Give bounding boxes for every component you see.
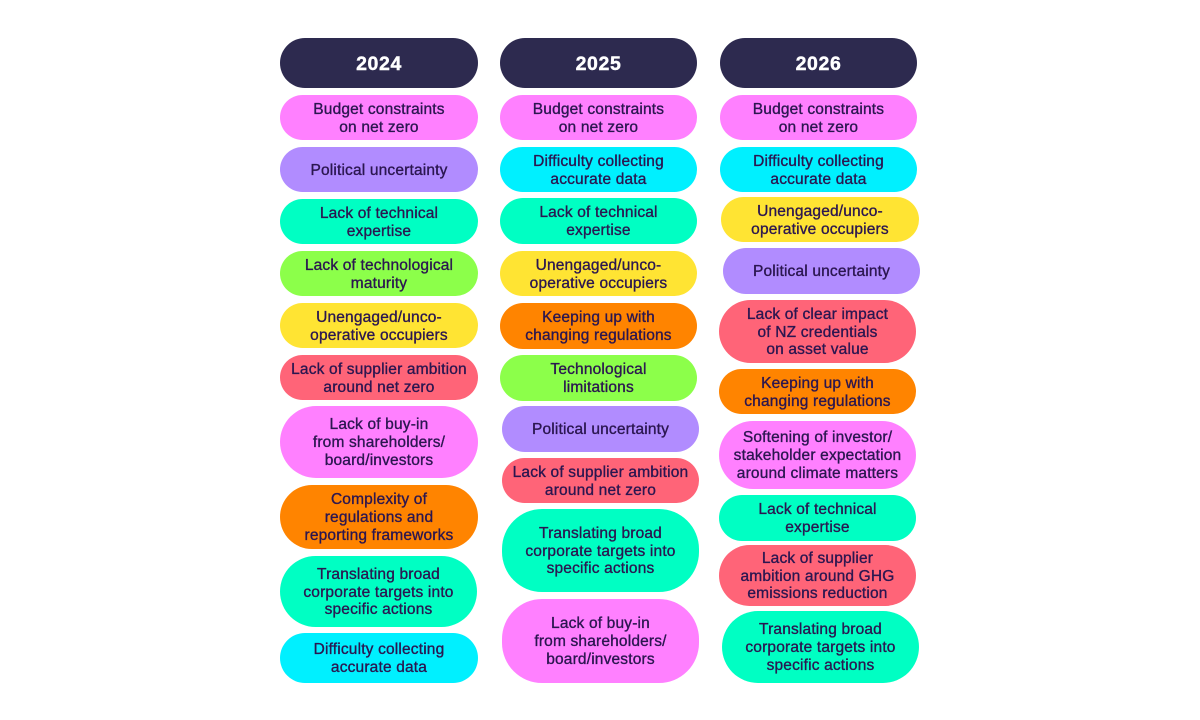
pill: clear impact of credentials: Lack of clear impact xyxy=(747,306,888,323)
pill: technical expertise: expertise xyxy=(347,222,411,240)
pill: technological limitations xyxy=(500,355,697,401)
pill: unengaged occupiers xyxy=(280,303,478,348)
pill: supplier ambition GHG: ambition around GHG xyxy=(740,568,894,585)
pill: unengaged occupiers: Unengaged/unco- xyxy=(536,257,661,274)
pill: difficulty collecting data: accurate data xyxy=(550,170,647,188)
pill: political uncertainty: Political uncertainty xyxy=(753,263,890,280)
pill: changing regulations xyxy=(500,303,697,349)
pill: supplier ambition GHG: emissions reduction xyxy=(747,585,888,602)
pill: translating targets: corporate targets into xyxy=(303,584,454,601)
pill: buy-in: Lack of buy-in xyxy=(330,416,428,433)
header: 2025 xyxy=(500,38,697,88)
pill: supplier ambition: around net zero xyxy=(323,378,435,396)
pill: technological maturity: Lack of technological xyxy=(305,257,453,274)
pill: supplier ambition: Lack of supplier ambition xyxy=(291,361,467,378)
pill: translating targets: specific actions xyxy=(547,560,654,577)
pill: budget constraints xyxy=(500,95,697,140)
pill: technical expertise: Lack of technical xyxy=(758,501,877,518)
pill: buy-in xyxy=(280,406,478,478)
pill: unengaged occupiers: operative occupiers xyxy=(530,274,667,292)
column: 2026 xyxy=(719,38,920,683)
pill: technological limitations: Technological xyxy=(550,361,647,378)
pill: technological maturity xyxy=(280,251,478,296)
pill: difficulty collecting data: accurate data xyxy=(331,659,427,676)
pill: technical expertise: Lack of technical xyxy=(539,204,658,221)
pill: political uncertainty xyxy=(280,147,478,192)
pill: unengaged occupiers: Unengaged/unco- xyxy=(757,203,883,220)
pill: translating targets xyxy=(502,509,699,592)
pill: softening of expectation xyxy=(719,421,916,489)
pill: budget constraints xyxy=(280,95,478,140)
pill: translating targets xyxy=(722,611,919,683)
pill: technical expertise: expertise xyxy=(566,222,631,239)
pill: clear impact of credentials: on asset value xyxy=(766,341,869,358)
pill: buy-in: board/investors xyxy=(546,651,655,668)
pill: difficulty collecting data: Difficulty collecting xyxy=(533,153,664,170)
pill: translating targets: Translating broad xyxy=(317,566,440,583)
pill: budget constraints: on net zero xyxy=(779,118,858,136)
pill: technological limitations: limitations xyxy=(563,379,634,396)
pill: translating targets xyxy=(280,556,477,627)
pill: technical expertise xyxy=(500,198,697,244)
pill: supplier ambition GHG xyxy=(719,545,916,606)
pill: buy-in: Lack of buy-in xyxy=(551,615,650,632)
pill: buy-in: from shareholders/ xyxy=(534,633,667,650)
pill: budget constraints: on net zero xyxy=(339,118,419,136)
pill: clear impact of credentials: of NZ credentials xyxy=(757,324,878,341)
header: 2025: 2025 xyxy=(576,53,621,75)
pill: translating targets: corporate targets into xyxy=(745,639,896,656)
pill: clear impact of credentials xyxy=(719,300,916,363)
pill: buy-in: from shareholders/ xyxy=(313,434,445,451)
pill: technological maturity: maturity xyxy=(351,274,407,292)
pill: buy-in xyxy=(502,599,699,683)
column: 2025 xyxy=(500,38,699,683)
column: 2024 xyxy=(280,38,478,683)
header: 2024 xyxy=(280,38,478,88)
pill: supplier ambition: Lack of supplier ambition xyxy=(513,464,688,481)
pill: supplier ambition xyxy=(502,458,699,503)
pill: technical expertise xyxy=(280,199,478,244)
pill: changing regulations: changing regulations xyxy=(744,392,891,410)
pill: complexity of regulations: reporting frameworks xyxy=(304,527,453,544)
pill: unengaged occupiers: operative occupiers xyxy=(310,326,448,344)
pill: difficulty collecting data xyxy=(500,147,697,192)
pill: political uncertainty xyxy=(502,406,699,452)
pill: complexity of regulations: regulations and xyxy=(325,509,433,526)
pill: political uncertainty xyxy=(723,248,920,294)
header: 2026: 2026 xyxy=(796,53,841,75)
pill: unengaged occupiers: Unengaged/unco- xyxy=(316,309,442,326)
pill: changing regulations: Keeping up with xyxy=(542,309,655,326)
pill: complexity of regulations xyxy=(280,485,478,549)
pill: difficulty collecting data: Difficulty collecting xyxy=(314,641,444,658)
pill: complexity of regulations: Complexity of xyxy=(331,491,427,508)
pill: softening of expectation: around climate matters xyxy=(737,465,898,482)
pill: difficulty collecting data: accurate data xyxy=(770,170,867,188)
pill: budget constraints: Budget constraints xyxy=(753,101,884,118)
pill: technical expertise xyxy=(719,495,916,541)
header: 2026 xyxy=(720,38,917,88)
pill: unengaged occupiers xyxy=(500,251,697,296)
pill: budget constraints: Budget constraints xyxy=(313,101,445,118)
pill: translating targets: specific actions xyxy=(767,657,874,674)
pill: supplier ambition GHG: Lack of supplier xyxy=(762,550,873,567)
pill: softening of expectation: Softening of investor/ xyxy=(743,429,892,446)
pill: unengaged occupiers xyxy=(721,197,919,242)
pill: translating targets: specific actions xyxy=(325,601,432,618)
pill: unengaged occupiers: operative occupiers xyxy=(751,220,889,238)
pill: translating targets: Translating broad xyxy=(539,525,662,542)
pill: difficulty collecting data xyxy=(280,633,478,683)
pill: political uncertainty: Political uncertainty xyxy=(532,421,669,438)
pill: budget constraints: Budget constraints xyxy=(533,101,664,118)
pill: difficulty collecting data: Difficulty collecting xyxy=(753,153,884,170)
pill: supplier ambition xyxy=(280,355,478,400)
header: 2024: 2024 xyxy=(356,53,402,75)
pill: buy-in: board/investors xyxy=(325,452,433,469)
pill: budget constraints: on net zero xyxy=(559,118,638,136)
pill: changing regulations: changing regulations xyxy=(525,327,672,344)
pill: budget constraints xyxy=(720,95,917,140)
pill: changing regulations xyxy=(719,369,916,414)
pill: supplier ambition: around net zero xyxy=(545,482,656,498)
pill: translating targets: Translating broad xyxy=(759,621,882,638)
pill: softening of expectation: stakeholder expectation xyxy=(734,447,901,464)
pill: translating targets: corporate targets into xyxy=(525,543,676,560)
pill: difficulty collecting data xyxy=(720,147,917,192)
pill: technical expertise: expertise xyxy=(785,519,850,536)
pill: changing regulations: Keeping up with xyxy=(761,375,874,392)
pill: technical expertise: Lack of technical xyxy=(320,205,438,222)
pill: political uncertainty: Political uncertainty xyxy=(310,162,448,179)
